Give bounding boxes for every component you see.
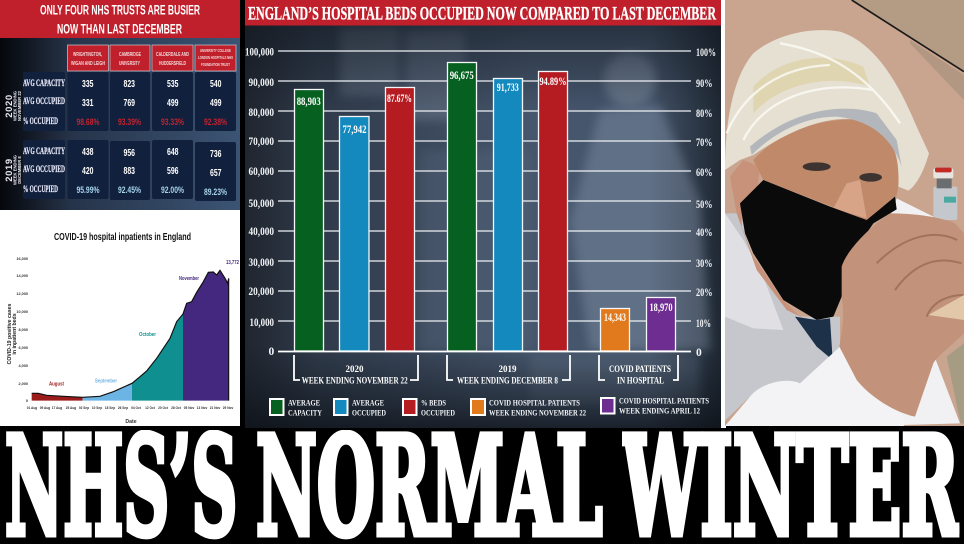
row labels: % OCCUPIED [23, 185, 58, 195]
area chart x axis: 02 Sep [79, 406, 89, 410]
row labels: AVG CAPACITY [23, 147, 65, 157]
hairnet [725, 30, 929, 191]
left axis labels: 60,000 [248, 166, 274, 178]
2019 table values: 736 [210, 148, 222, 160]
left axis labels: 40,000 [248, 226, 274, 238]
area chart title: COVID-19 hospital inpatients in England [54, 232, 191, 243]
bracket: 2020: 2020 [346, 364, 364, 374]
left axis labels: 80,000 [248, 107, 274, 119]
2020 table values [76, 78, 227, 128]
row labels: AVG CAPACITY [23, 79, 65, 89]
2020 table values: 93.33% [161, 117, 184, 128]
ghosted hospital photo background [340, 26, 710, 405]
area chart y axis: 14,000 [16, 274, 28, 278]
year side labels: 2020 [4, 94, 15, 118]
area chart month labels: 13,772 [226, 260, 239, 266]
area chart x axis: 25 Aug [66, 406, 76, 410]
year side labels [4, 90, 22, 185]
tie [795, 317, 833, 360]
bracket: 2020: WEEK ENDING NOVEMBER 22 [302, 376, 408, 386]
area chart x axis: 12 Oct [145, 406, 156, 410]
year side labels: NOVEMBER 22 [17, 90, 22, 121]
eyes [803, 162, 882, 182]
area chart month labels: October [139, 332, 156, 338]
legend: COVID HOSPITAL PATIENTS [489, 398, 580, 408]
panel: COVID-19 inpatients area chart [0, 210, 240, 426]
left axis labels: 10,000 [250, 317, 274, 329]
area chart y axis title: COVID-19 positive cases [7, 303, 13, 364]
right axis labels: 90% [696, 78, 712, 90]
column headers: UNIVERSITY [119, 61, 140, 67]
bracket: COVID patients: IN HOSPITAL [617, 376, 664, 386]
year side labels: WEEK ENDING [12, 91, 18, 121]
area chart x axis: 28 Oct [171, 406, 182, 410]
area chart x axis: 09 Aug [40, 406, 50, 410]
2019 table values: 883 [124, 165, 135, 177]
area chart x axis: 13 Nov [197, 406, 207, 410]
legend: OCCUPIED [352, 408, 386, 418]
legend: AVERAGE [352, 398, 384, 408]
bracket: 2019: WEEK ENDING DECEMBER 8 [457, 376, 558, 386]
left axis labels: 100,000 [245, 46, 274, 58]
left axis labels: 0 [268, 346, 274, 358]
area chart y axis: 8,000 [18, 328, 28, 332]
right axis labels [696, 47, 716, 359]
chart heading [245, 0, 721, 26]
area chart plot [32, 270, 229, 401]
bar value labels: 87.67% [387, 93, 412, 105]
2019 table values: 657 [210, 167, 222, 179]
table heading: NOW THAN LAST DECEMBER [57, 22, 182, 36]
2019 table values: 89.23% [204, 187, 227, 198]
right axis labels: 0 [696, 347, 702, 359]
2020 table values: 331 [82, 97, 94, 109]
column headers [68, 45, 236, 71]
year side labels: WEEK ENDING [12, 155, 18, 185]
column headers: UNIVERSITY COLLEGE [200, 48, 231, 53]
area chart x axis: 10 Sep [92, 406, 102, 410]
row labels: % OCCUPIED [23, 117, 58, 127]
vial [933, 168, 957, 220]
bar value labels [297, 70, 673, 324]
area chart month labels: November [179, 276, 199, 282]
bracket: 2019: 2019 [498, 364, 517, 374]
legend: WEEK ENDING APRIL 12 [619, 406, 700, 416]
area chart x axis: 21 Nov [210, 406, 220, 410]
2020 table values: 93.39% [118, 117, 141, 128]
left axis labels [245, 46, 274, 358]
area chart y axis title: in inpatient beds [12, 313, 18, 355]
area chart x axis: 20 Oct [158, 406, 169, 410]
sleeve [725, 347, 904, 426]
2019 table values: 92.00% [161, 185, 184, 196]
legend: CAPACITY [288, 408, 322, 418]
legend: WEEK ENDING NOVEMBER 22 [489, 408, 586, 418]
area chart month labels: August [49, 382, 64, 388]
column headers: CALDERDALE AND [156, 52, 189, 58]
area chart y axis: 2,000 [18, 382, 28, 386]
area chart x axis: Date [125, 419, 137, 425]
area chart x axis: 18 Sep [105, 406, 115, 410]
bracket: 2019 [447, 355, 570, 386]
area chart x axis: 26 Sep [118, 406, 128, 410]
area chart month labels [49, 260, 239, 388]
bar value labels: 96,675 [450, 70, 474, 82]
area chart x axis: 04 Oct [131, 406, 142, 410]
2020 table values: 769 [124, 97, 135, 109]
2020 table values: 92.38% [204, 117, 227, 128]
area chart y axis: 4,000 [18, 364, 28, 368]
ceiling [852, 0, 964, 72]
bracket: COVID patients [599, 355, 678, 386]
legend: AVERAGE [288, 398, 320, 408]
divider strip [721, 0, 726, 428]
area chart x axis: 17 Aug [52, 406, 62, 410]
area chart y axis: 12,000 [16, 292, 28, 296]
year side labels: DECEMBER 8 [17, 156, 22, 184]
area chart y axis title [7, 303, 18, 364]
2020 table values: 540 [210, 78, 222, 90]
row labels: AVG OCCUPIED [23, 165, 65, 175]
bar value labels: 94.89% [540, 76, 566, 88]
area chart y axis: 6,000 [18, 346, 28, 350]
baseline [278, 350, 691, 352]
legend: OCCUPIED [421, 408, 455, 418]
area chart y axis: 16,000 [16, 257, 28, 261]
right axis labels: 50% [696, 199, 712, 211]
left axis labels: 30,000 [248, 257, 274, 269]
bars: COVID patients group [600, 298, 676, 351]
2019 table values: 420 [82, 165, 94, 177]
panel: hospital beds bar chart [245, 0, 721, 428]
right axis labels: 100% [696, 47, 716, 59]
left axis labels: 20,000 [248, 286, 274, 298]
right axis labels: 10% [696, 318, 711, 330]
legend: % BEDS [421, 398, 446, 408]
ear and neck [730, 160, 800, 317]
table cell backgrounds [23, 72, 236, 201]
row labels [23, 79, 65, 195]
bar value labels: 88,903 [297, 96, 321, 108]
area chart y axis [16, 257, 28, 403]
2019 table values: 648 [167, 146, 179, 158]
left axis labels: 90,000 [248, 77, 274, 89]
2020 table values: 823 [124, 78, 135, 90]
left axis labels: 50,000 [248, 198, 274, 210]
2019 table values: 956 [124, 147, 135, 159]
area chart x axis: 05 Nov [184, 406, 194, 410]
bracket: COVID patients: COVID PATIENTS [609, 364, 671, 374]
row labels: AVG OCCUPIED [23, 97, 65, 107]
area chart y axis: 0 [26, 399, 28, 403]
right axis labels: 80% [696, 108, 712, 120]
white lab coat [725, 198, 964, 425]
2020 table values: 335 [82, 78, 94, 90]
column headers: HUDDERSFIELD [159, 61, 186, 67]
area chart month labels: September [95, 378, 117, 384]
area chart y axis: 10,000 [16, 310, 28, 314]
right axis labels: 20% [696, 287, 712, 299]
right axis labels: 40% [696, 227, 712, 239]
area chart x axis [27, 406, 233, 425]
area chart x axis: 29 Nov [223, 406, 233, 410]
face mask [740, 180, 897, 320]
photo: man in hairnet and mask holding vial [725, 0, 964, 426]
gridlines [278, 51, 691, 321]
2019 table values: 438 [82, 146, 94, 158]
2019 table values [76, 146, 227, 198]
2019 table values: 95.99% [76, 185, 100, 196]
bar value labels: 77,942 [342, 124, 367, 136]
panel: NHS trusts table [0, 0, 240, 210]
column headers: WIGAN AND LEIGH [71, 61, 105, 67]
right axis labels: 60% [696, 167, 712, 179]
column headers: LONDON HOSPITALS NHS [198, 55, 233, 60]
face [753, 120, 898, 220]
2020 table values: 535 [167, 78, 179, 90]
2019 table values: 92.45% [118, 185, 141, 196]
legend [270, 396, 709, 418]
hand [839, 213, 964, 417]
legend: COVID HOSPITAL PATIENTS [619, 396, 709, 406]
bar value labels: 14,343 [604, 312, 626, 324]
column headers: WRIGHTINGTON, [73, 52, 102, 58]
bar value labels: 91,733 [497, 82, 519, 94]
right axis labels: 70% [696, 137, 712, 149]
table heading [0, 0, 240, 38]
year side labels: 2019 [4, 158, 15, 182]
bars: 2019 group [448, 62, 568, 351]
left axis labels: 70,000 [248, 136, 274, 148]
bars: 2020 group [294, 88, 414, 351]
bar value labels: 18,970 [650, 302, 673, 314]
2020 table values: 499 [167, 97, 179, 109]
table heading: ONLY FOUR NHS TRUSTS ARE BUSIER [40, 2, 200, 18]
2019 table values: 596 [167, 165, 179, 177]
column headers: CAMBRIDGE [119, 52, 141, 58]
column headers: FOUNDATION TRUST [201, 62, 230, 67]
2020 table values: 98.68% [76, 117, 100, 128]
right axis labels: 30% [696, 258, 712, 270]
bracket: 2020 [294, 355, 418, 386]
area chart x axis: 01 Aug [27, 406, 37, 410]
2020 table values: 499 [210, 97, 222, 109]
